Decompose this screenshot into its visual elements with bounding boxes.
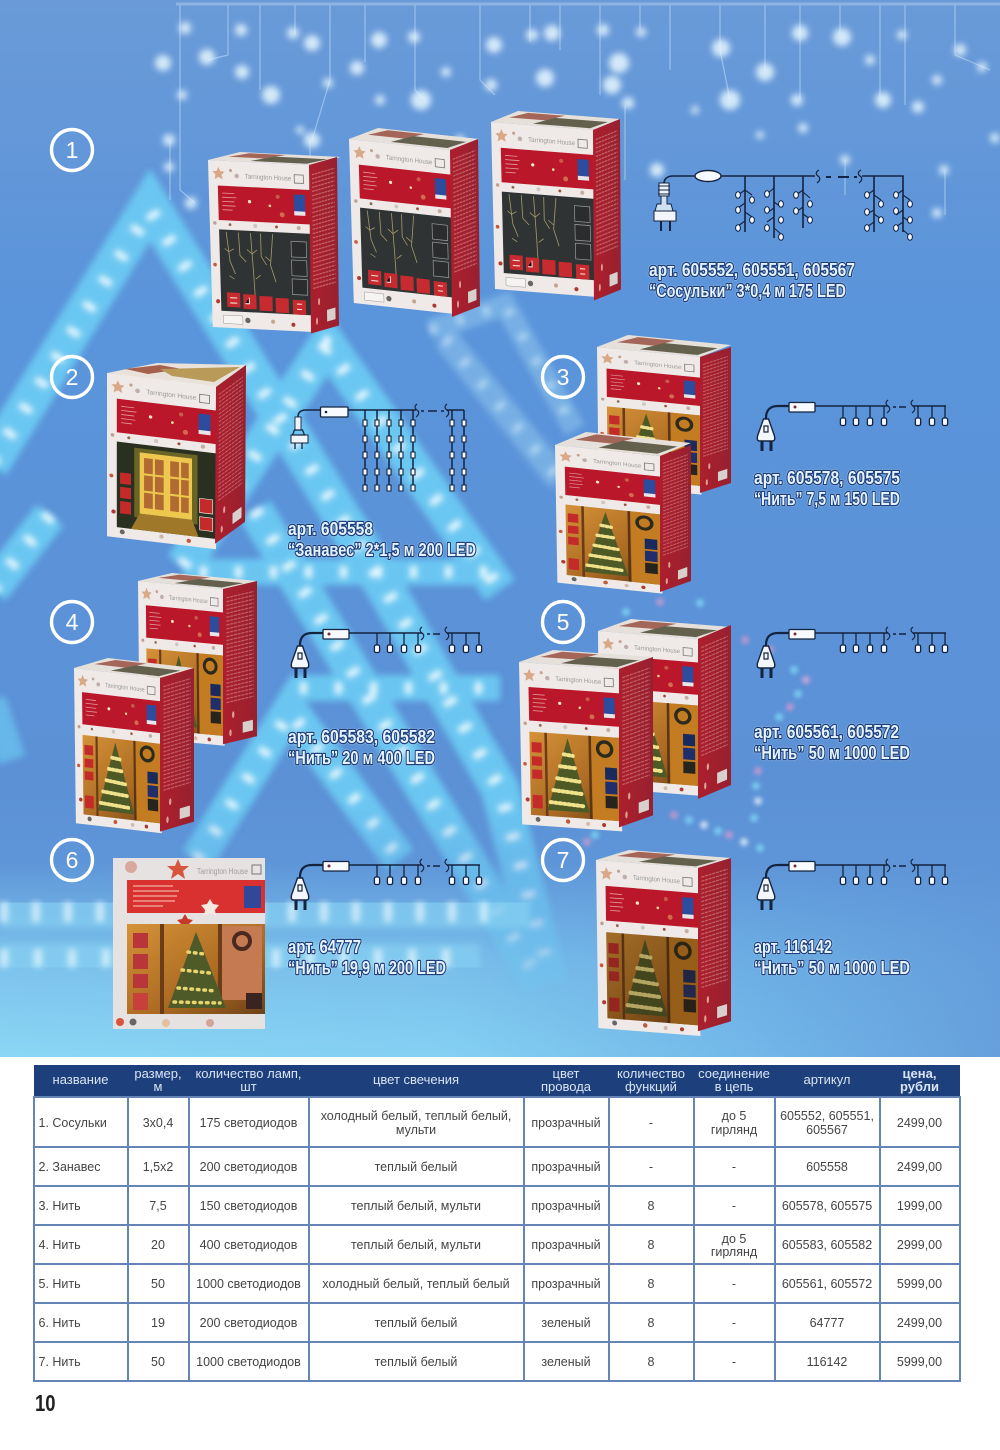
specifications table: теплый белый xyxy=(375,1316,457,1330)
product 1: three icicle light boxes: Tarrington House xyxy=(386,154,433,166)
specifications table: прозрачный xyxy=(531,1160,601,1174)
specifications table: гирлянд xyxy=(711,1245,757,1259)
product 4: two string light boxes: Tarrington House xyxy=(169,595,208,605)
product 4: two string light boxes xyxy=(74,573,257,833)
product 2: curtain wiring diagram xyxy=(291,404,466,491)
specifications table: функций xyxy=(625,1078,677,1094)
product 1: three icicle light boxes: Tarrington House xyxy=(528,137,575,147)
specifications table: теплый белый xyxy=(375,1355,457,1369)
specifications table: 2499,00 xyxy=(897,1160,942,1174)
product 5: caption xyxy=(754,722,910,763)
product 3: caption: арт. 605578, 605575 xyxy=(754,468,900,488)
product 1: caption: арт. 605552, 605551, 605567 xyxy=(649,260,855,280)
product 1: caption xyxy=(649,260,855,301)
product 6: caption: арт. 64777 xyxy=(288,937,361,957)
specifications table: мульти xyxy=(396,1122,436,1136)
product 2: curtain light box xyxy=(107,363,246,549)
product 3: string wiring diagram xyxy=(757,400,948,451)
specifications table: 1999,00 xyxy=(897,1199,942,1213)
product 6: flat box: Tarrington House xyxy=(197,867,248,876)
specifications table: 19 xyxy=(151,1316,165,1330)
product 7: string wiring diagram xyxy=(757,859,948,910)
product 6: caption xyxy=(288,937,446,978)
number badge 2 xyxy=(52,356,92,398)
specifications table: 200 светодиодов xyxy=(200,1316,297,1330)
product 4: two string light boxes: Tarrington House xyxy=(105,683,145,694)
product 2: caption: “Занавес” 2*1,5 м 200 LED xyxy=(288,540,476,560)
specifications table: 8 xyxy=(648,1199,654,1213)
specifications table: 116142 xyxy=(807,1355,847,1369)
specifications table: - xyxy=(732,1355,736,1369)
specifications table: прозрачный xyxy=(531,1199,601,1213)
product 1: three icicle light boxes: Tarrington House xyxy=(245,173,292,183)
specifications table: прозрачный xyxy=(531,1238,601,1252)
number badge 3 xyxy=(542,356,584,398)
number badge 4 xyxy=(52,602,92,642)
specifications table: 1,5х2 xyxy=(143,1160,173,1174)
specifications table: шт xyxy=(240,1078,257,1094)
specifications table: 8 xyxy=(648,1316,654,1330)
number badge 7 xyxy=(542,840,584,880)
specifications table: - xyxy=(732,1277,736,1291)
specifications table: 5999,00 xyxy=(897,1277,942,1291)
specifications table: соединение xyxy=(698,1066,770,1081)
background: hanging icicle lights xyxy=(155,4,1000,218)
number badge 6: 6 xyxy=(66,847,78,873)
specifications table: 5999,00 xyxy=(897,1355,942,1369)
specifications table: прозрачный xyxy=(531,1116,601,1130)
specifications table: 8 xyxy=(648,1355,654,1369)
background: glowing tree outlines xyxy=(0,205,810,985)
specifications table: размер, xyxy=(134,1066,182,1081)
specifications table: 2. Занавес xyxy=(38,1160,100,1174)
specifications table: 6. Нить xyxy=(38,1316,81,1330)
specifications table: количество xyxy=(617,1066,685,1081)
product 6: flat box xyxy=(113,858,265,1029)
specifications table: 7,5 xyxy=(149,1199,167,1213)
specifications table: 2499,00 xyxy=(897,1316,942,1330)
product 4: caption xyxy=(288,727,435,768)
product 5: two string light boxes xyxy=(519,619,731,831)
specifications table: 605567 xyxy=(806,1122,848,1136)
specifications table: артикул xyxy=(803,1072,851,1087)
product 7: caption: “Нить” 50 м 1000 LED xyxy=(754,958,910,978)
specifications table: 1000 светодиодов xyxy=(196,1355,301,1369)
product 4: caption: арт. 605583, 605582 xyxy=(288,727,435,747)
specifications table: цвет xyxy=(553,1066,579,1081)
specifications table: 1000 светодиодов xyxy=(196,1277,301,1291)
number badge 7: 7 xyxy=(557,847,569,873)
number badge 5: 5 xyxy=(557,609,569,635)
specifications table: 2499,00 xyxy=(897,1116,942,1130)
product 1: icicle wiring diagram xyxy=(654,170,912,240)
product 6: caption: “Нить” 19,9 м 200 LED xyxy=(288,958,446,978)
specifications table: прозрачный xyxy=(531,1277,601,1291)
specifications table: 5. Нить xyxy=(38,1277,81,1291)
product 1: caption: “Сосульки” 3*0,4 м 175 LED xyxy=(649,281,846,301)
specifications table: 7. Нить xyxy=(38,1355,81,1369)
product 4: string wiring diagram xyxy=(291,627,482,678)
specifications table: 64777 xyxy=(810,1316,844,1330)
specifications table: м xyxy=(154,1078,162,1094)
specifications table: зеленый xyxy=(541,1316,591,1330)
specifications table: 150 светодиодов xyxy=(200,1199,297,1213)
specifications table: 4. Нить xyxy=(38,1238,81,1252)
background: faint coloured star of lights xyxy=(583,598,810,852)
specifications table: 3х0,4 xyxy=(143,1116,173,1130)
number badge 1: 1 xyxy=(66,137,78,163)
specifications table: 50 xyxy=(151,1355,165,1369)
specifications table: цвет свечения xyxy=(373,1072,459,1087)
specifications table: 2999,00 xyxy=(897,1238,942,1252)
product 7: string light box xyxy=(596,850,731,1036)
specifications table: - xyxy=(649,1160,653,1174)
specifications table: до 5 xyxy=(722,1109,746,1123)
specifications table: теплый белый, мульти xyxy=(351,1199,481,1213)
specifications table: цена, xyxy=(903,1066,936,1081)
specifications table: 8 xyxy=(648,1277,654,1291)
product 5: two string light boxes: Tarrington House xyxy=(555,676,602,686)
specifications table: холодный белый, теплый белый, xyxy=(321,1109,511,1123)
product 3: two string light boxes: Tarrington House xyxy=(634,360,682,371)
product 7: caption: арт. 116142 xyxy=(754,937,832,957)
specifications table: - xyxy=(649,1116,653,1130)
number badge 5 xyxy=(542,602,584,642)
specifications table: провода xyxy=(541,1078,591,1094)
specifications table: 175 светодиодов xyxy=(200,1116,297,1130)
product 7: caption xyxy=(754,937,910,978)
product 1: three icicle light boxes xyxy=(208,111,621,333)
product 3: two string light boxes xyxy=(555,335,731,594)
product 5: caption: “Нить” 50 м 1000 LED xyxy=(754,743,910,763)
product 6: string wiring diagram xyxy=(291,859,482,910)
specifications table: 50 xyxy=(151,1277,165,1291)
specifications table: зеленый xyxy=(541,1355,591,1369)
specifications table: в цепь xyxy=(715,1078,753,1094)
number badge 6 xyxy=(52,840,92,880)
specifications table: 1. Сосульки xyxy=(38,1116,107,1130)
page number: 10 xyxy=(35,1390,55,1416)
specifications table: 200 светодиодов xyxy=(200,1160,297,1174)
specifications table: 3. Нить xyxy=(38,1199,81,1213)
product 5: string wiring diagram xyxy=(757,627,948,678)
product 3: caption xyxy=(754,468,900,509)
specifications table: гирлянд xyxy=(711,1122,757,1136)
specifications table: теплый белый xyxy=(375,1160,457,1174)
specifications table: теплый белый, мульти xyxy=(351,1238,481,1252)
background photo: blue gradient xyxy=(0,0,1000,1057)
product 2: caption: арт. 605558 xyxy=(288,519,373,539)
specifications table: 605578, 605575 xyxy=(782,1199,872,1213)
specifications table: холодный белый, теплый белый xyxy=(322,1277,510,1291)
specifications table: 605583, 605582 xyxy=(782,1238,872,1252)
number badge 3: 3 xyxy=(557,364,569,390)
number badge 4: 4 xyxy=(66,609,79,635)
specifications table: - xyxy=(732,1199,736,1213)
number badge 1 xyxy=(52,130,92,170)
product 2: curtain light box: Tarrington House xyxy=(146,389,197,402)
specifications table: количество ламп, xyxy=(195,1066,302,1081)
specifications table: 8 xyxy=(648,1238,654,1252)
product 4: caption: “Нить” 20 м 400 LED xyxy=(288,748,435,768)
specifications table: 605558 xyxy=(806,1160,848,1174)
product 5: caption: арт. 605561, 605572 xyxy=(754,722,899,742)
specifications table: 605561, 605572 xyxy=(782,1277,872,1291)
specifications table: название xyxy=(53,1072,108,1087)
specifications table: 605552, 605551, xyxy=(780,1109,874,1123)
number badge 2: 2 xyxy=(66,364,78,390)
product 5: two string light boxes: Tarrington House xyxy=(634,645,681,655)
specifications table: - xyxy=(732,1160,736,1174)
product 2: caption xyxy=(288,519,476,560)
specifications table xyxy=(33,1065,961,1382)
specifications table: до 5 xyxy=(722,1232,746,1246)
product 7: string light box: Tarrington House xyxy=(633,875,680,885)
specifications table: 400 светодиодов xyxy=(200,1238,297,1252)
specifications table: - xyxy=(732,1316,736,1330)
product 3: two string light boxes: Tarrington House xyxy=(593,458,642,470)
specifications table: рубли xyxy=(900,1078,939,1094)
product 3: caption: “Нить” 7,5 м 150 LED xyxy=(754,489,900,509)
specifications table: 20 xyxy=(151,1238,165,1252)
